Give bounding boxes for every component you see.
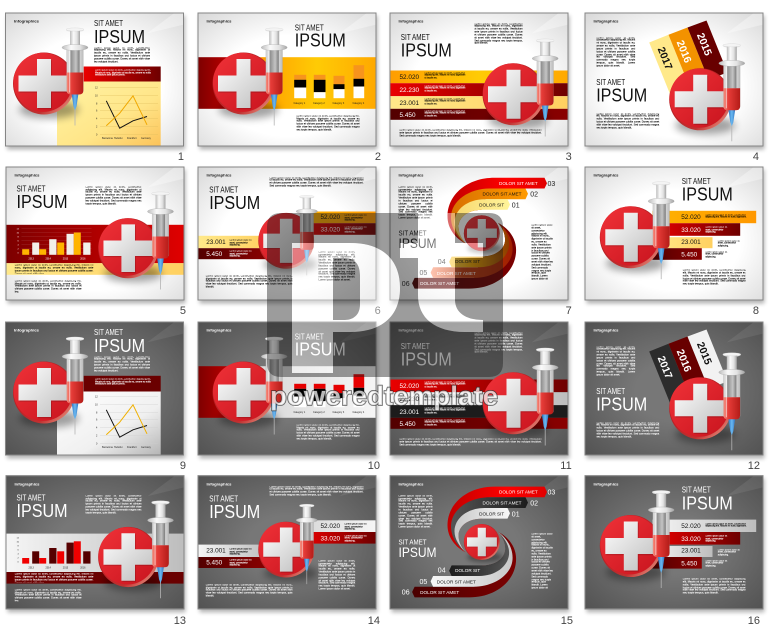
staggered data bars: 5.450	[681, 560, 698, 567]
ribbon labels: DOLOR SIT	[479, 202, 504, 208]
year stripes: 2016	[674, 348, 694, 374]
right data bands	[302, 212, 376, 235]
year stripes: 2015	[694, 31, 714, 58]
icon: medical cross badge	[600, 206, 666, 272]
line chart: 0	[96, 134, 98, 136]
left data bands	[198, 545, 268, 568]
bar chart: 0	[18, 252, 20, 254]
band captions: Lorem ipsum dolor sit amet, consectetur adipiscing elit. Mauris mi nunc dignissim ut iaculis eu.	[424, 72, 465, 79]
ribbon: upper arrows	[448, 487, 547, 552]
icon: syringe	[62, 337, 88, 434]
title: IPSUM	[596, 394, 647, 414]
bar chart: 6	[18, 240, 20, 242]
icon: syringe	[148, 501, 174, 598]
ribbon numbers: 01	[512, 511, 520, 518]
title: IPSUM	[596, 86, 647, 106]
staggered data bars: Lorem ipsum dolor sit amet, consectetur adipiscing elit. Mauris mi nunc dignissim.	[705, 523, 747, 528]
heading: infographics: Infographics	[206, 482, 232, 486]
watermark: pt logo and wordmark: poweredtemplate	[270, 381, 498, 411]
panel: white band	[258, 366, 376, 418]
icon: medical cross badge	[212, 362, 278, 428]
title: IPSUM	[398, 235, 436, 251]
text block: left: Lorem ipsum dolor sit amet, consectetur adipiscing elit. Mauris mi nunc, dignissim ut iaculis eu, ornare eu nulla. Vestibulum ante ipsum primis in faucibus orci luctus et ultrices posuere cubilia curae. Donec sit amet nibh vitae leo volutpat tincidunt. Sed commodo magna nec turpis tempus, quis blandit. Lorem ipsum dolor sit amet.	[398, 495, 433, 528]
icon: syringe	[532, 39, 558, 136]
slide number 15: 15	[561, 615, 573, 627]
slide 6: light split bands layout	[198, 166, 378, 304]
title: SIT AMET	[16, 184, 46, 194]
slide number 3: 3	[566, 151, 572, 163]
line chart: 10	[95, 94, 98, 98]
bar chart: 2014	[46, 258, 51, 260]
icon: medical cross badge	[482, 63, 548, 129]
slide number 6: 6	[375, 305, 381, 317]
bar chart: 2014	[46, 566, 51, 569]
year stripes	[649, 330, 728, 404]
title	[94, 20, 144, 43]
line chart: 10	[95, 404, 98, 406]
title	[596, 79, 646, 102]
right data bands: 52.020	[320, 523, 340, 530]
bar chart: 2015	[63, 566, 69, 569]
heading: infographics: Infographics	[14, 20, 39, 24]
icon: medical cross badge	[600, 515, 666, 581]
line chart: 12	[95, 396, 98, 398]
slide 5: light bar chart layout	[6, 166, 186, 304]
title: SIT AMET	[398, 230, 427, 238]
bar chart: 2013	[28, 566, 34, 569]
ribbon labels	[420, 181, 538, 286]
ribbon: lower arrows	[412, 223, 516, 289]
icon: syringe	[296, 195, 317, 275]
ribbon numbers: 05	[420, 270, 427, 277]
line chart: Barcelona	[102, 446, 113, 449]
stacked bar chart: Category 3	[332, 102, 345, 105]
line chart: Germany	[141, 137, 152, 140]
ribbon labels: DOLOR SIT	[479, 511, 504, 516]
slide 14: dark split bands layout	[198, 475, 378, 612]
band values: 23.001	[400, 100, 419, 107]
title	[398, 230, 436, 251]
slide number 9: 9	[180, 460, 186, 472]
ribbon labels: DOLOR SIT AMET	[420, 281, 459, 286]
band values: 52.020	[400, 74, 419, 81]
stacked bar chart: Category 1	[294, 411, 306, 414]
red bar text: Lorem ipsum dolor sit amet, consectetur adipiscing elit. Mauris mi nunc, dignissim ut iaculis eu, ornare eu nulla vestibulum ante ipsum primis.	[95, 378, 151, 386]
ribbon numbers: 01	[512, 202, 520, 210]
band values: 52.020	[400, 383, 419, 390]
ribbon: upper arrows	[448, 178, 547, 244]
left data bands: 5.450	[206, 560, 223, 567]
panel: dark red text band	[6, 572, 184, 584]
panel: red chart band	[6, 225, 184, 263]
ribbon numbers	[402, 490, 555, 597]
ribbon numbers: 03	[548, 490, 555, 497]
bar chart: 10	[16, 232, 20, 234]
panel: dark red band	[198, 57, 227, 109]
ribbon labels: DOLOR SIT AMET	[499, 490, 538, 495]
stacked bar chart	[294, 374, 365, 414]
staggered data bars	[652, 211, 756, 260]
icon: medical cross badge	[464, 524, 502, 562]
staggered data bars: 33.020	[681, 227, 701, 234]
right data bands: 52.020	[320, 214, 340, 221]
year stripes: 2017	[655, 354, 675, 381]
bar chart: 12	[16, 228, 20, 230]
icon: syringe	[62, 28, 88, 125]
slide number 11: 11	[560, 460, 572, 472]
stacked bar chart: Category 4	[352, 411, 365, 414]
ribbon numbers: 05	[420, 579, 427, 586]
band captions: Lorem ipsum dolor sit amet, consectetur adipiscing elit. Mauris mi nunc dignissim ut iaculis eu.	[424, 98, 465, 105]
title: SIT AMET	[16, 493, 46, 502]
slide number 5: 5	[180, 305, 186, 317]
line chart: 4	[96, 426, 98, 430]
left data bands: 5.450	[206, 251, 223, 258]
slide 3: light bands layout	[390, 12, 570, 150]
icon: medical cross badge	[13, 362, 79, 428]
stacked bar chart	[294, 65, 365, 105]
panel: red text bar	[84, 66, 161, 82]
line chart: Germany	[141, 446, 152, 449]
staggered data bars: 52.020	[681, 523, 701, 530]
title: SIT AMET	[209, 494, 238, 503]
title: IPSUM	[295, 340, 346, 360]
band values: 22.230	[400, 396, 419, 403]
stacked bar chart: Category 1	[294, 102, 306, 105]
title	[401, 342, 452, 370]
heading: infographics: Infographics	[14, 174, 40, 178]
icon: medical cross badge	[669, 377, 735, 443]
ribbon labels: DOLOR SIT AMET	[499, 181, 538, 186]
icon: medical cross badge	[98, 527, 162, 591]
slide 10: dark stacked columns layout	[198, 322, 378, 458]
staggered data bars: 23.001	[681, 239, 701, 246]
ribbon numbers	[402, 181, 555, 288]
ribbon numbers: 06	[402, 281, 410, 288]
slide 12: dark timeline stripes layout	[584, 322, 764, 458]
bar chart: 2015	[63, 258, 69, 260]
bar chart	[16, 537, 90, 569]
panel: white chart panel	[57, 392, 161, 456]
heading: infographics: Infographics	[594, 482, 618, 486]
year stripes: 2016	[674, 39, 694, 65]
icon: syringe	[261, 28, 287, 125]
bar chart: 2016	[80, 566, 86, 569]
ribbon: lower arrows	[412, 532, 516, 597]
ribbon numbers: 06	[402, 590, 410, 597]
title	[94, 328, 145, 356]
stacked bar chart: Category 4	[352, 102, 365, 105]
bar chart: 4	[18, 553, 20, 555]
left data bands: 23.001	[206, 239, 226, 246]
band captions: Lorem ipsum dolor sit amet, consectetur adipiscing elit. Mauris mi nunc dignissim ut iaculis eu.	[424, 419, 465, 426]
title: IPSUM	[295, 30, 346, 50]
ribbon numbers: 04	[438, 259, 446, 266]
bar chart: 6	[18, 549, 20, 551]
ribbon numbers: 04	[438, 568, 446, 575]
title: SIT AMET	[209, 186, 238, 194]
title: SIT AMET	[401, 33, 430, 42]
slide 16: dark staggered bars layout	[584, 475, 764, 612]
title: IPSUM	[401, 350, 452, 370]
ribbon numbers: 02	[530, 500, 538, 507]
band values	[400, 383, 419, 428]
ribbon labels: DOLOR SIT AMET	[437, 271, 476, 276]
bar chart: 8	[18, 236, 20, 238]
ribbon labels: DOLOR SIT	[455, 259, 480, 264]
heading: infographics: Infographics	[206, 174, 232, 178]
title: SIT AMET	[596, 78, 625, 87]
band captions: Lorem ipsum dolor sit amet, consectetur adipiscing elit. Mauris mi nunc dignissim ut iaculis eu.	[424, 381, 465, 388]
panel: orange band	[258, 57, 376, 109]
ribbon labels: DOLOR SIT	[455, 568, 480, 573]
staggered data bars: 23.001	[681, 548, 701, 555]
title: SIT AMET	[398, 539, 427, 546]
title: SIT AMET	[401, 342, 430, 351]
line chart: 8	[96, 412, 98, 414]
left data bands	[198, 236, 268, 259]
ribbon labels	[420, 490, 538, 595]
title: IPSUM	[209, 502, 260, 522]
bar chart: 2	[18, 557, 20, 559]
ribbon labels: DOLOR SIT AMET	[482, 500, 522, 505]
bar chart: 10	[16, 541, 20, 543]
icon: medical cross badge	[464, 215, 502, 254]
heading: infographics: Infographics	[398, 20, 424, 24]
heading: infographics: Infographics	[206, 20, 232, 24]
icon: medical cross badge	[212, 52, 278, 118]
band values: 23.001	[400, 409, 419, 416]
title: SIT AMET	[682, 177, 711, 186]
panel: dark red band	[198, 366, 248, 418]
heading: infographics: Infographics	[398, 482, 424, 486]
right data bands: 33.020	[320, 226, 340, 234]
title: IPSUM	[94, 336, 145, 356]
band values: 5.450	[400, 112, 416, 119]
year stripes	[649, 20, 728, 94]
line chart: 8	[96, 102, 98, 106]
slide 11: dark bands layout	[390, 322, 570, 458]
stacked bar chart: Category 2	[313, 411, 325, 414]
slide 15: dark ribbon layout	[390, 475, 570, 612]
right data bands	[302, 520, 376, 544]
ribbon labels: DOLOR SIT AMET	[420, 590, 459, 595]
line chart: 0	[96, 442, 98, 446]
title	[596, 387, 647, 414]
heading: infographics: Infographics	[594, 20, 618, 24]
line chart: 6	[96, 110, 98, 112]
band captions	[424, 381, 466, 428]
left data bands: 23.001	[206, 548, 226, 555]
title: IPSUM	[401, 40, 452, 60]
slide number 7: 7	[566, 305, 572, 317]
icon: syringe	[532, 348, 558, 446]
ribbon labels: DOLOR SIT AMET	[482, 192, 522, 196]
title: IPSUM	[16, 501, 68, 521]
staggered data bars	[652, 520, 756, 569]
title: SIT AMET	[682, 486, 711, 495]
panel: dark red text bar	[84, 376, 161, 392]
bar chart: 2	[18, 248, 20, 250]
title: SIT AMET	[596, 387, 625, 396]
icon: syringe	[296, 504, 317, 584]
slide number 16: 16	[748, 615, 760, 627]
panel: yellow text band	[6, 263, 184, 275]
ribbon numbers: 02	[530, 192, 538, 198]
heading: infographics: Infographics	[14, 328, 39, 332]
line chart: Helsinki	[114, 446, 123, 449]
title	[209, 494, 260, 522]
title: SIT AMET	[94, 19, 123, 28]
slide number 1: 1	[178, 151, 184, 163]
slide 9: dark chart layout	[5, 322, 185, 458]
title: IPSUM	[682, 184, 733, 204]
line chart: 2	[96, 434, 98, 438]
slide number 8: 8	[753, 305, 759, 317]
data bands	[390, 70, 568, 120]
title: IPSUM	[682, 493, 733, 513]
stacked bar chart: Category 2	[313, 102, 325, 105]
band captions: Lorem ipsum dolor sit amet, consectetur adipiscing elit. Mauris mi nunc dignissim ut iaculis eu.	[424, 110, 465, 117]
heading: infographics: Infographics	[14, 482, 40, 486]
line chart	[95, 86, 158, 140]
year stripes: 2017	[655, 45, 675, 72]
slide number 4: 4	[753, 151, 759, 163]
ribbon numbers: 03	[548, 181, 555, 188]
band values	[400, 74, 419, 119]
line chart: Frankfurt	[127, 137, 137, 140]
bar chart: 12	[16, 537, 20, 539]
year stripes: 2015	[694, 340, 714, 367]
title	[16, 493, 68, 521]
band values: 22.230	[400, 87, 419, 94]
title: IPSUM	[209, 193, 260, 213]
bar chart: 2016	[80, 258, 86, 260]
title	[682, 177, 733, 204]
bar chart: 2013	[28, 258, 34, 260]
staggered data bars: 33.020	[681, 536, 701, 543]
red bar text: Lorem ipsum dolor sit amet, consectetur adipiscing elit. Mauris mi nunc, dignissim ut iaculis eu, ornare eu nulla vestibulum ante ipsum primis.	[95, 70, 151, 77]
icon: syringe	[261, 337, 287, 434]
line chart: 6	[96, 418, 98, 422]
icon: medical cross badge	[258, 213, 318, 272]
icon: syringe	[719, 353, 745, 450]
panel: light chart band	[6, 534, 184, 572]
title	[295, 332, 346, 360]
band captions: Lorem ipsum dolor sit amet, consectetur adipiscing elit. Mauris mi nunc dignissim ut iaculis eu.	[424, 407, 465, 414]
staggered data bars: 5.450	[681, 252, 698, 258]
icon: syringe	[719, 44, 745, 141]
slide number 13: 13	[174, 615, 186, 627]
band captions: Lorem ipsum dolor sit amet, consectetur adipiscing elit. Mauris mi nunc dignissim ut iaculis eu.	[424, 85, 465, 92]
title	[398, 539, 436, 560]
data bands	[390, 380, 568, 429]
title: IPSUM	[398, 544, 436, 560]
title	[16, 186, 66, 208]
slide number 12: 12	[748, 460, 760, 472]
title: SIT AMET	[295, 24, 324, 32]
icon: medical cross badge	[258, 522, 318, 581]
title: IPSUM	[94, 27, 145, 47]
line chart: Barcelona	[102, 137, 113, 140]
icon: medical cross badge	[669, 68, 735, 134]
icon: medical cross badge	[98, 218, 162, 282]
heading: infographics: Infographics	[398, 174, 424, 178]
slide 4: light timeline stripes layout	[584, 12, 764, 150]
title	[295, 24, 344, 46]
icon: syringe	[648, 490, 674, 588]
band values: 5.450	[400, 421, 416, 428]
slide number 14: 14	[368, 615, 380, 627]
band captions: Lorem ipsum dolor sit amet, consectetur adipiscing elit. Mauris mi nunc dignissim ut iaculis eu.	[424, 394, 465, 401]
watermark: pt logo and wordmark	[267, 213, 503, 411]
staggered data bars: 52.020	[681, 214, 701, 221]
heading: infographics: Infographics	[594, 174, 618, 178]
slide 2: light stacked columns layout	[198, 12, 378, 150]
bar chart: 0	[18, 561, 20, 563]
line chart: 12	[95, 86, 98, 90]
slide 7: light ribbon layout	[390, 166, 570, 304]
slide 1: light chart layout	[5, 12, 185, 150]
line chart: Frankfurt	[127, 446, 137, 449]
panel: yellow chart panel	[57, 82, 161, 146]
stacked bar chart: Category 3	[332, 411, 345, 414]
band captions	[424, 72, 466, 119]
bar chart	[16, 228, 92, 260]
icon: syringe	[148, 192, 174, 290]
heading: infographics: Infographics	[206, 328, 232, 332]
icon: medical cross badge	[482, 372, 548, 438]
staggered data bars: Lorem ipsum dolor sit amet, consectetur adipiscing elit. Mauris mi nunc dignissim.	[705, 214, 747, 219]
bar chart: 4	[18, 244, 20, 246]
icon: syringe	[648, 182, 674, 279]
title	[682, 486, 733, 513]
line chart	[95, 396, 158, 449]
heading: infographics: Infographics	[594, 328, 618, 332]
slide 8: light staggered bars layout	[584, 166, 764, 304]
icon: medical cross badge	[13, 52, 79, 118]
title: SIT AMET	[295, 332, 324, 342]
slide number 2: 2	[375, 151, 381, 163]
slide 13: dark bar chart layout	[6, 475, 186, 612]
line chart: Helsinki	[114, 137, 123, 140]
heading: infographics: Infographics	[398, 328, 424, 332]
title	[209, 186, 260, 213]
title: IPSUM	[16, 192, 68, 212]
slide number 10: 10	[368, 460, 380, 472]
line chart: 2	[96, 126, 98, 128]
text block: left: Lorem ipsum dolor sit amet, consectetur adipiscing elit. Mauris mi nunc, dignissim ut iaculis eu, ornare eu nulla. Vestibulum ante ipsum primis in faucibus orci luctus et ultrices posuere cubilia curae. Donec sit amet nibh vitae leo volutpat tincidunt. Sed commodo magna nec turpis tempus, quis blandit. Lorem ipsum dolor sit amet.	[398, 186, 433, 220]
bar chart: 8	[18, 545, 20, 547]
ribbon labels: DOLOR SIT AMET	[437, 580, 476, 585]
right data bands: 33.020	[320, 535, 340, 542]
title	[401, 34, 450, 56]
title: SIT AMET	[94, 328, 123, 337]
line chart: 4	[96, 118, 98, 120]
